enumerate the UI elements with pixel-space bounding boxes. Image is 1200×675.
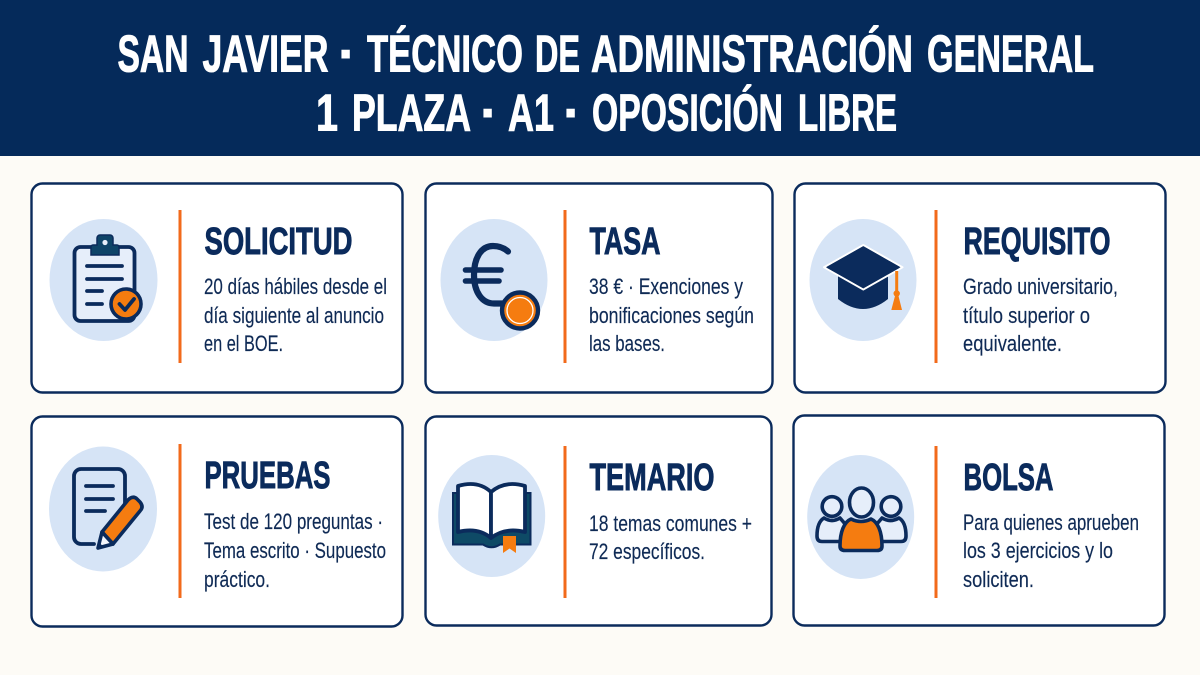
title line 1: JAVIER (202, 26, 328, 84)
body text (963, 510, 1139, 592)
body text: 38 € · Exenciones y (589, 274, 743, 299)
title line 2 (316, 84, 897, 142)
body text: Tema escrito · Supuesto (204, 538, 386, 563)
heading: TASA (590, 221, 660, 263)
body text (204, 509, 386, 592)
body text: equivalente. (963, 331, 1062, 356)
heading: REQUISITO (964, 221, 1110, 263)
title line 1: TÉCNICO (367, 26, 523, 84)
title line 2: OPOSICIÓN (592, 84, 783, 142)
body text: 20 días hábiles desde el (204, 274, 387, 299)
title line 1: ADMINISTRACIÓN (591, 26, 913, 84)
title line 2: PLAZA (352, 84, 471, 142)
panel: requisito (794, 184, 1166, 392)
heading: SOLICITUD (204, 221, 352, 263)
title line 2: A1 (508, 84, 554, 142)
heading: TEMARIO (590, 457, 714, 499)
body text: bonificaciones según (589, 303, 754, 328)
body text: 18 temas comunes + (589, 511, 752, 536)
icon: open book with bookmark (453, 484, 530, 553)
panel: solicitud (32, 184, 402, 392)
header banner with title (0, 0, 1200, 156)
icon: graduation cap (824, 245, 902, 310)
body text: en el BOE. (204, 331, 283, 356)
body text: práctico. (204, 567, 270, 592)
title line 1: DE (535, 26, 580, 84)
title line 2: LIBRE (798, 84, 897, 142)
body text: soliciten. (963, 567, 1034, 592)
heading: BOLSA (964, 457, 1054, 499)
title line 2: · (563, 84, 581, 142)
icon: euro and coin (466, 246, 538, 328)
title line 2: · (480, 84, 498, 142)
body text (963, 274, 1118, 356)
title line 1: SAN (118, 26, 188, 84)
panel: tasa (426, 184, 772, 392)
title line 1 (118, 26, 1094, 84)
body text (589, 511, 752, 564)
body text: las bases. (589, 331, 665, 356)
body text: Test de 120 preguntas · (204, 509, 383, 534)
body text: 72 específicos. (589, 539, 705, 564)
title line 1: · (338, 26, 356, 84)
heading: PRUEBAS (204, 455, 330, 497)
body text (204, 274, 387, 356)
icon: document and pencil (74, 469, 142, 548)
body text: los 3 ejercicios y lo (963, 538, 1113, 563)
body text: Para quienes aprueben (963, 510, 1139, 535)
body text (589, 274, 754, 356)
body text: día siguiente al anuncio (204, 303, 384, 328)
icon: clipboard with check (74, 235, 141, 321)
panel: pruebas (32, 416, 402, 626)
title line 2: 1 (316, 84, 338, 142)
body text: Grado universitario, (963, 274, 1118, 299)
panel: bolsa (794, 416, 1164, 626)
title line 1: GENERAL (927, 26, 1094, 84)
panel: temario (426, 416, 772, 626)
icon: group of people (817, 488, 906, 550)
body text: título superior o (963, 303, 1090, 328)
